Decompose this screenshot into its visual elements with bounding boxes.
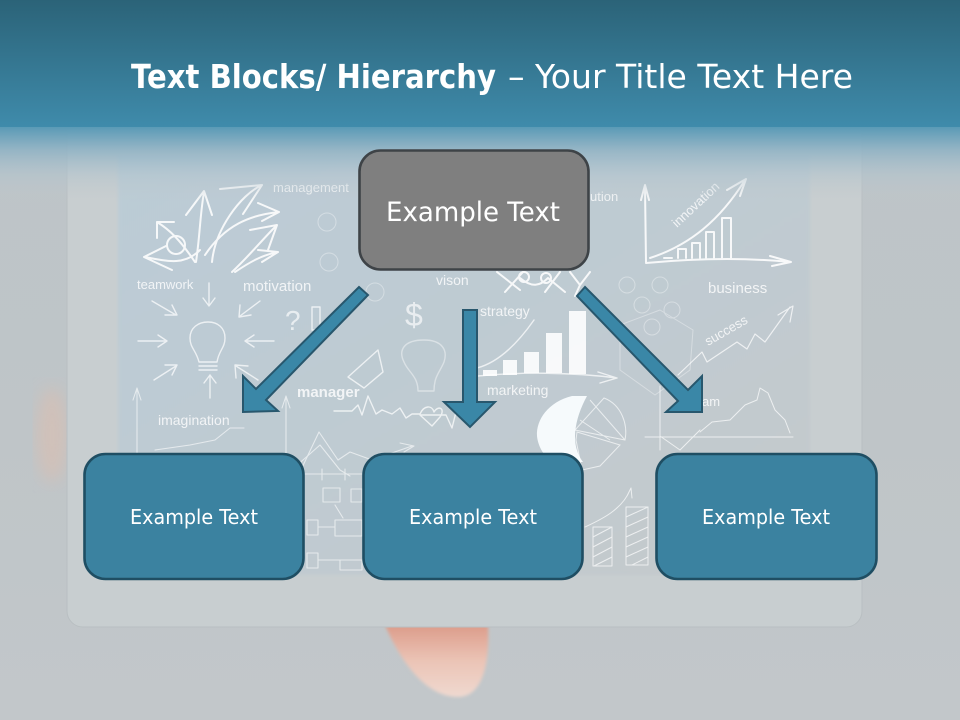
label: manager: manager xyxy=(297,384,360,401)
header band xyxy=(0,0,960,202)
doodle: question mark, dollar and arrows: $ xyxy=(405,297,423,333)
doodle: people chain xyxy=(497,272,590,296)
label: imagination: imagination xyxy=(158,412,230,428)
label: motivation: motivation xyxy=(243,278,311,295)
doodle: marketing chart axes xyxy=(477,320,617,383)
label: team: am xyxy=(702,394,720,409)
label: marketing: marketing xyxy=(487,382,548,398)
doodle: light bulb with arrows xyxy=(138,283,274,398)
pie chart xyxy=(537,396,626,470)
doodle: success trend line xyxy=(678,306,793,375)
arrow: to left box xyxy=(243,287,368,412)
doodle: question mark, dollar and arrows xyxy=(285,297,445,391)
doodle: growth arrows cluster xyxy=(144,185,279,272)
marketing bars xyxy=(483,311,586,376)
bottom right box: Example Text xyxy=(702,505,830,529)
doodle: innovation bar chart xyxy=(641,179,791,266)
doodle: bottom-right hatched bars xyxy=(585,488,648,566)
doodle: question mark, dollar and arrows: ? xyxy=(285,305,301,336)
doodle: bottom-right line chart xyxy=(645,386,793,450)
label: management: management xyxy=(273,180,349,195)
top box xyxy=(360,150,588,270)
arrow: to centre box xyxy=(444,310,495,427)
arrow: to right box xyxy=(577,287,702,412)
bottom right box xyxy=(656,454,876,579)
label: business: business xyxy=(708,280,767,297)
label: vision: vison xyxy=(436,272,469,288)
bottom centre box xyxy=(364,454,582,579)
bottom left box: Example Text xyxy=(130,505,258,529)
doodle: heartbeat line xyxy=(334,396,470,428)
title: – Your Title Text Here xyxy=(508,57,853,96)
doodle: partial visible labels xyxy=(436,189,767,409)
label: solution: ution xyxy=(590,189,618,204)
title: Text Blocks/ Hierarchy xyxy=(131,57,496,96)
doodle: left axes and line chart xyxy=(133,388,414,570)
label: teamwork: teamwork xyxy=(137,277,194,292)
bottom left box xyxy=(84,454,304,579)
doodle: small faint bulbs xyxy=(318,213,693,395)
top box: Example Text xyxy=(386,197,560,228)
label: success: success xyxy=(702,312,751,349)
label: innovation: innovation xyxy=(669,179,722,230)
bottom centre box: Example Text xyxy=(409,505,537,529)
label: strategy: strategy xyxy=(480,303,530,319)
title xyxy=(131,57,853,96)
